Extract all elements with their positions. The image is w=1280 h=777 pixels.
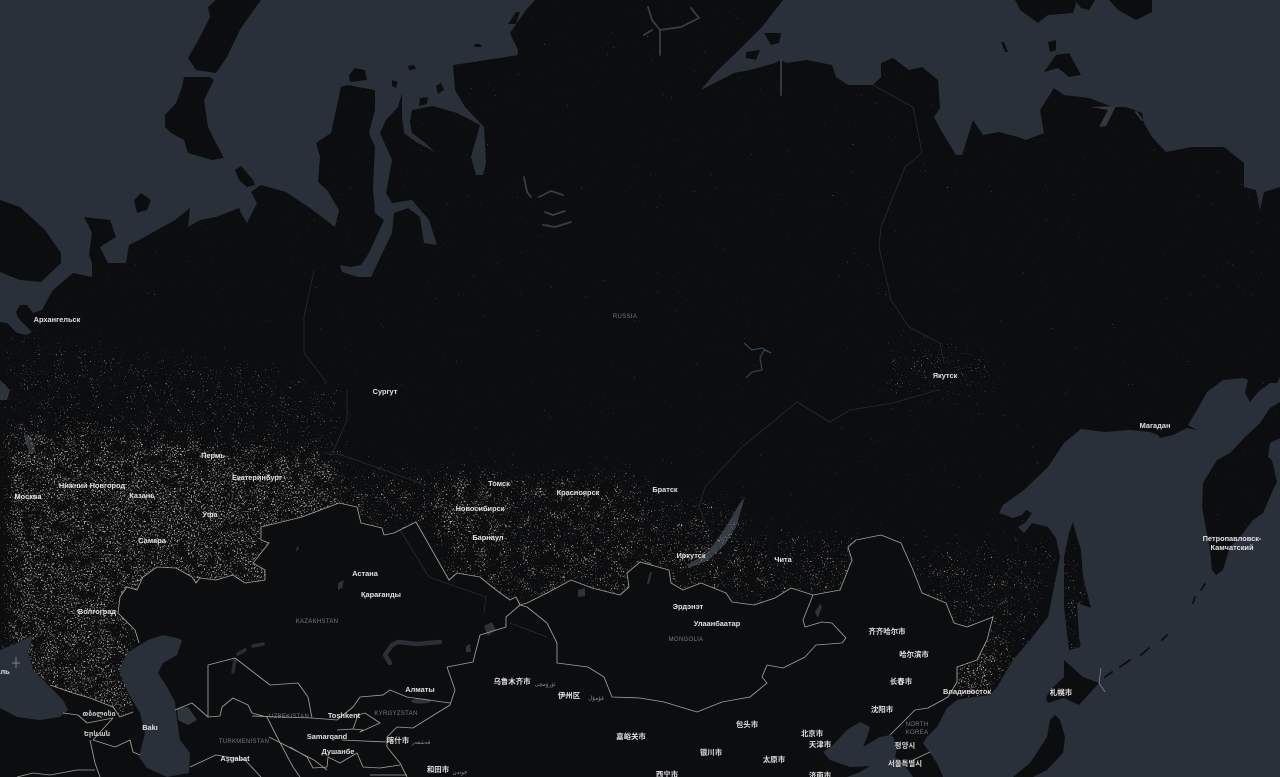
- label: Volgograd: Волгоград: [78, 607, 116, 616]
- regional boundaries (faint): [304, 85, 944, 637]
- islands: Kuril chain: [1105, 584, 1205, 677]
- label: Jiayuguan: 嘉峪关市: [616, 732, 646, 741]
- islands: Lyakhovsky: [1001, 40, 1081, 77]
- label: Yizhou: 伊州区: [558, 691, 581, 700]
- lake: Baikal: [687, 497, 745, 568]
- label: Yizhou Uyghur: قۇمۇل: [588, 696, 604, 702]
- label: Russia: RUSSIA: [613, 314, 637, 320]
- label: Irkutsk: Иркутск: [676, 551, 706, 560]
- lake: Issyk-Kul: [411, 698, 431, 704]
- label: Nizhny Novgorod: Нижний Новгород: [59, 481, 125, 490]
- label: Samara: Самара: [138, 536, 167, 545]
- label: Baotou: 包头市: [736, 720, 759, 729]
- label: Mongolia: MONGOLIA: [669, 637, 703, 643]
- label: Harbin: 哈尔滨市: [899, 650, 929, 659]
- sea: Black Sea: [0, 635, 68, 720]
- island: Kolguyev: [134, 193, 151, 213]
- island: Novaya Zemlya north: [188, 0, 261, 73]
- label: Taiyuan: 太原市: [763, 755, 786, 764]
- lakes: small inland: [296, 546, 822, 652]
- island: Hokkaido: [1046, 660, 1099, 705]
- city and country labels: [0, 314, 1262, 777]
- lakes: Ladoga and Onega: [0, 380, 36, 454]
- label: North Korea: KOREA: [906, 730, 928, 736]
- label: Ufa: Уфа: [202, 510, 218, 519]
- islands: Begichev: [746, 33, 781, 60]
- label: Moscow: Москва: [15, 492, 42, 501]
- label: Dushanbe: Душанбе: [322, 747, 354, 756]
- label: Ashgabat: Aşgabat: [220, 754, 250, 763]
- label: Shenyang: 沈阳市: [871, 705, 894, 714]
- bay: Garabogaz: [177, 707, 197, 725]
- label: Hotan Uyghur: خوتەن: [452, 770, 468, 776]
- border: Caucasus: [17, 685, 140, 777]
- label: Almaty: Алматы: [405, 685, 435, 694]
- label: Turkmenistan: TURKMENISTAN: [219, 739, 269, 745]
- islands: small Kara Sea group: [392, 12, 520, 106]
- label: Yekaterinburg: Екатеринбург: [232, 473, 282, 482]
- label: Magadan: Магадан: [1140, 421, 1170, 430]
- label: Petropavlovsk-Kamchatsky: Петропавловск-: [1203, 534, 1261, 543]
- label: Yakutsk: Якутск: [933, 371, 958, 380]
- label: Astana: Астана: [352, 569, 379, 578]
- border: Fergana and Tajikistan: [190, 713, 407, 777]
- label: Surgut: Сургут: [373, 387, 398, 396]
- bay: Chaun inset: [1091, 106, 1116, 127]
- label: Kashgar: 喀什市: [387, 736, 410, 745]
- label: Perm: Пермь: [201, 451, 225, 460]
- label: Pyongyang: 평양시: [895, 741, 915, 750]
- island: Novaya Zemlya south: [165, 77, 224, 160]
- label: Kyrgyzstan: KYRGYZSTAN: [374, 711, 418, 717]
- label: Tianjin: 天津市: [809, 740, 832, 749]
- label: Barnaul: Барнаул: [472, 533, 504, 542]
- river: Khatanga: [1136, 112, 1142, 120]
- label: Arkhangelsk: Архангельск: [34, 315, 81, 324]
- label: Novosibirsk: Новосибирск: [456, 504, 505, 513]
- label: Ulaanbaatar: Улаанбаатар: [694, 619, 741, 628]
- border: Russia-Kazakhstan: [118, 503, 520, 643]
- label: Beijing: 北京市: [801, 729, 824, 738]
- label: Kazakhstan: KAZAKHSTAN: [296, 619, 338, 625]
- label: Chita: Чита: [774, 555, 793, 564]
- inland seas: [0, 497, 745, 777]
- label: Urumqi Uyghur: ئۈرۈمچى: [534, 682, 556, 688]
- label: Seoul: 서울특별시: [888, 759, 922, 768]
- island: Kola peninsula: [0, 200, 61, 282]
- label: Samarkand: Samarqand: [307, 732, 348, 741]
- label: Erdenet: Эрдэнэт: [673, 602, 704, 611]
- lake: Aral remnants: [233, 644, 263, 672]
- island: Bely: [349, 68, 367, 82]
- border: Kazakhstan-China: [387, 605, 520, 777]
- label: Hotan: 和田市: [427, 765, 450, 774]
- label: Yinchuan: 银川市: [700, 748, 723, 757]
- label: Karaganda: Қарағанды: [361, 590, 401, 599]
- label: Sevastopol cut off: ль: [0, 667, 10, 676]
- label: Yerevan: Երևան: [84, 730, 110, 738]
- label: Petropavlovsk-Kamchatsky: Камчатский: [1210, 543, 1254, 552]
- lake: Taymyr: [644, 7, 699, 55]
- strait marker: Hokkaido: [1099, 668, 1105, 692]
- island: Vaygach: [235, 166, 255, 187]
- river: Anabar estuary: [780, 60, 782, 95]
- label: Uzbekistan: UZBEKISTAN: [269, 714, 309, 720]
- border: Kazakhstan-Central Asia: [175, 658, 450, 777]
- label: Tbilisi: თბილისი: [82, 710, 116, 718]
- island: Honshu: [1013, 715, 1065, 777]
- label: Tomsk: Томск: [488, 479, 510, 488]
- label: Krasnoyarsk: Красноярск: [557, 488, 600, 497]
- lakes and rivers: [0, 7, 1142, 704]
- label: Tashkent: Toshkent: [328, 711, 361, 720]
- country borders: [17, 503, 993, 777]
- marker: Crimea: [12, 657, 20, 668]
- sea: Caspian: [119, 635, 190, 777]
- label: Vladivostok: Владивосток: [943, 687, 991, 696]
- lake: Balkhash: [385, 642, 440, 663]
- label: Baku: Bakı: [142, 723, 158, 732]
- lake: Vilyuy reservoir: [744, 343, 771, 378]
- border: China-North Korea: [890, 697, 948, 760]
- label: Bratsk: Братск: [652, 485, 678, 494]
- label: North Korea: NORTH: [906, 722, 928, 728]
- border: Mongolia-China: [520, 595, 846, 712]
- border: Russia-China east: [813, 535, 993, 697]
- islands: New Siberian: [1015, 0, 1152, 23]
- rivers: Taymyr lakes: [524, 177, 571, 227]
- label: Kazan: Казань: [129, 491, 155, 500]
- label: Qiqihar: 齐齐哈尔市: [869, 627, 906, 636]
- label: Sapporo: 札幌市: [1050, 688, 1073, 697]
- label: Changchun: 长春市: [890, 677, 913, 686]
- label: Urumqi: 乌鲁木齐市: [494, 677, 531, 686]
- peninsula: Kamchatka: [1202, 402, 1280, 575]
- border: Russia-Mongolia: [520, 562, 813, 605]
- island: Sakhalin: [1064, 522, 1091, 650]
- label: Kashgar Uyghur: قەشقەر: [411, 740, 431, 746]
